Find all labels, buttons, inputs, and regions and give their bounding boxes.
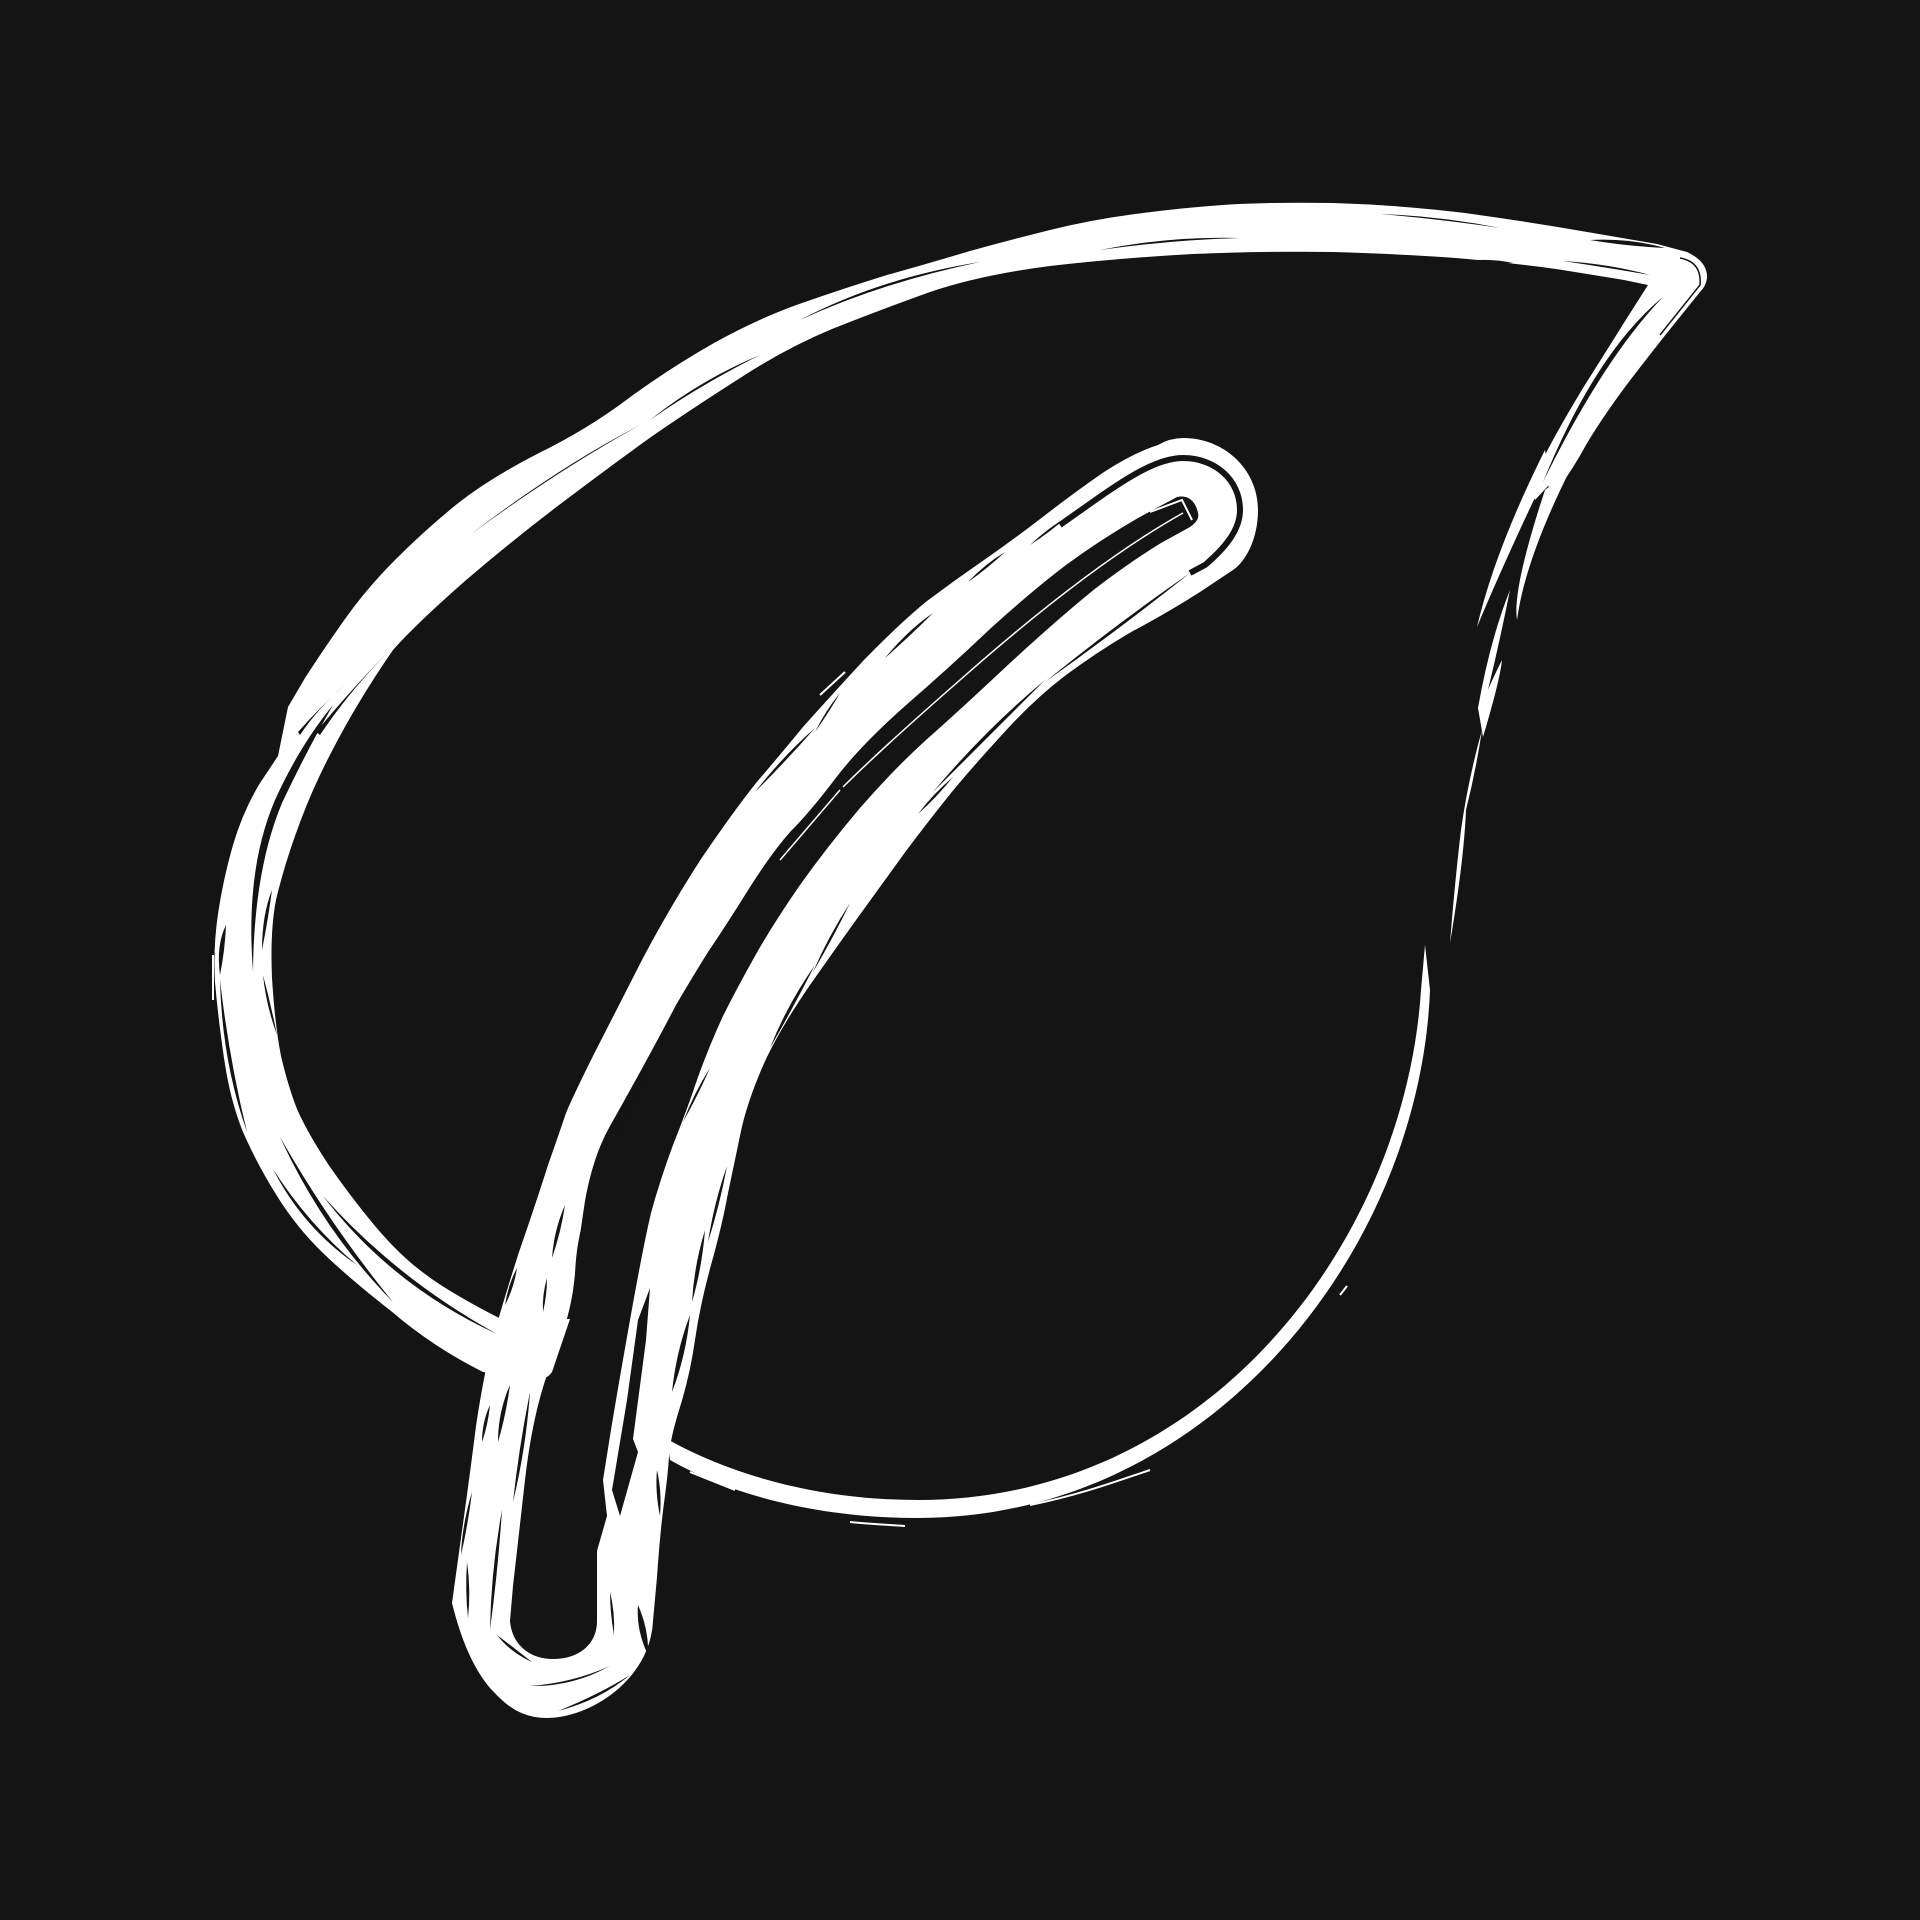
brush texture: stem tip dark ring bbox=[1060, 458, 1240, 573]
brush texture: white wisps in stem channel bbox=[780, 500, 1192, 860]
brush texture: leaf blade streaks bbox=[219, 214, 1665, 1334]
leaf blade outline: fading strands on the right edge bbox=[1450, 450, 1570, 943]
leaf blade outline: lower right edge bbox=[667, 945, 1430, 1518]
brush texture: thin wisps outside the outline bbox=[213, 672, 1347, 1526]
stem junction knob bbox=[483, 1319, 570, 1380]
leaf stem bbox=[452, 438, 1258, 1718]
leaf icon artwork bbox=[213, 203, 1707, 1718]
brush texture: dark wedge in right stem band bbox=[612, 1288, 650, 1516]
leaf blade outline: left, top and upper right edge bbox=[214, 203, 1707, 1372]
brush texture: stem streaks bbox=[461, 517, 1190, 1711]
brush texture: leaf tip edge line bbox=[1660, 258, 1700, 335]
